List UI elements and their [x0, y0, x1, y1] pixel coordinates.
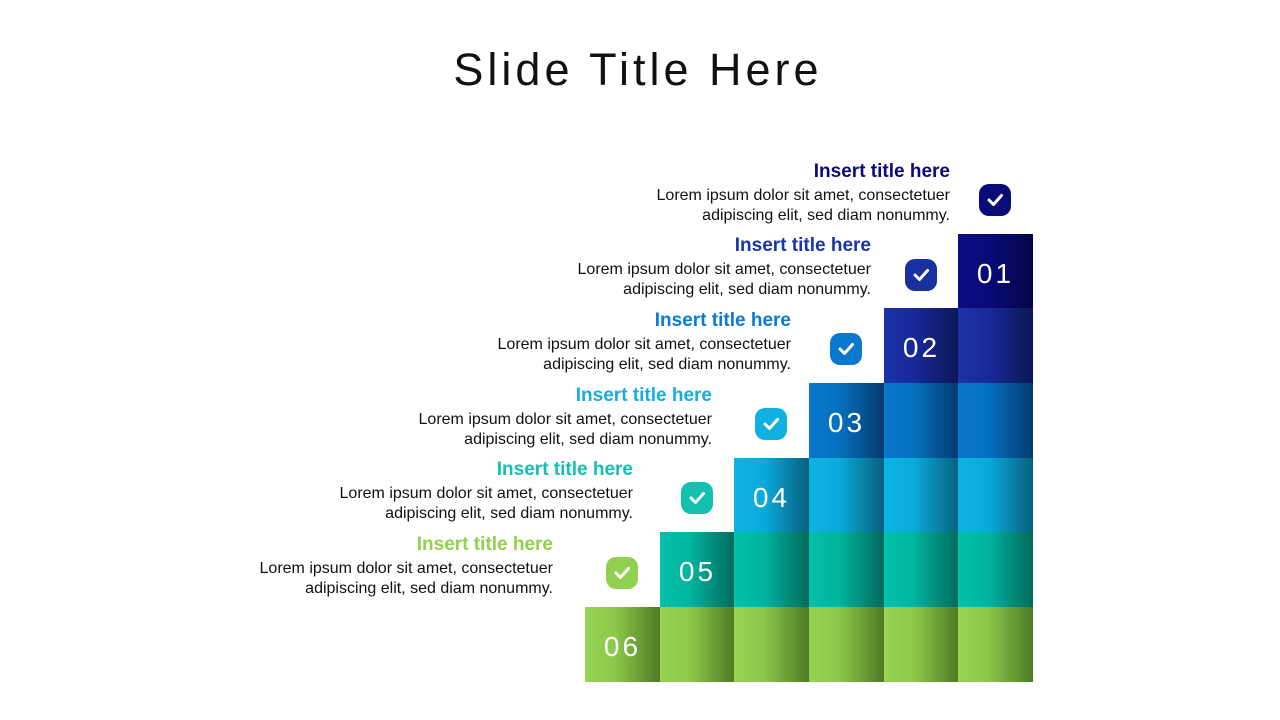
step 06: [585, 607, 660, 682]
text block 01: [657, 161, 950, 224]
step 06: 06: [604, 630, 641, 662]
text block 04: [419, 385, 712, 448]
text block 05: adipiscing elit, sed diam nonummy.: [385, 504, 633, 522]
text block 05: Lorem ipsum dolor sit amet, consectetuer: [340, 485, 633, 502]
staircase chart: [585, 234, 1033, 682]
step 02: 02: [903, 332, 940, 362]
text block 06: adipiscing elit, sed diam nonummy.: [305, 580, 553, 596]
text block 03: Lorem ipsum dolor sit amet, consectetuer: [498, 336, 791, 353]
step 02: [884, 308, 959, 383]
title: Slide Title Here: [453, 44, 823, 95]
step 01: [958, 234, 1033, 309]
step 04: 04: [753, 482, 790, 512]
text block 02: [578, 235, 871, 298]
text block 03: [498, 310, 791, 372]
text block 03: adipiscing elit, sed diam nonummy.: [543, 356, 791, 372]
text block 06: [260, 534, 553, 596]
text block 05: [340, 459, 633, 522]
icon: check 05: [681, 482, 713, 514]
text block 04: adipiscing elit, sed diam nonummy.: [464, 430, 712, 448]
text block 04: Lorem ipsum dolor sit amet, consectetuer: [419, 411, 712, 428]
step 01: 01: [977, 258, 1014, 288]
text block 06: Insert title here: [417, 534, 553, 555]
text block 01: adipiscing elit, sed diam nonummy.: [702, 206, 950, 224]
text block 01: Insert title here: [814, 161, 950, 182]
text block 02: Insert title here: [735, 235, 871, 256]
text block 03: Insert title here: [655, 310, 791, 331]
icon: check 06: [606, 557, 638, 589]
step 05: [660, 532, 735, 607]
step 03: [809, 383, 884, 458]
text block 02: adipiscing elit, sed diam nonummy.: [623, 280, 871, 298]
icon: check 03: [830, 333, 862, 365]
icon: check 02: [905, 259, 937, 291]
text block 05: Insert title here: [497, 459, 633, 480]
icon: check 04: [755, 408, 787, 440]
text block 04: Insert title here: [576, 385, 712, 406]
text block 06: Lorem ipsum dolor sit amet, consectetuer: [260, 560, 553, 577]
text block 02: Lorem ipsum dolor sit amet, consectetuer: [578, 261, 871, 278]
step 04: [734, 458, 809, 533]
text block 01: Lorem ipsum dolor sit amet, consectetuer: [657, 187, 950, 204]
step 03: 03: [828, 406, 865, 438]
step 05: 05: [679, 556, 716, 586]
icon: check 01: [979, 184, 1011, 216]
